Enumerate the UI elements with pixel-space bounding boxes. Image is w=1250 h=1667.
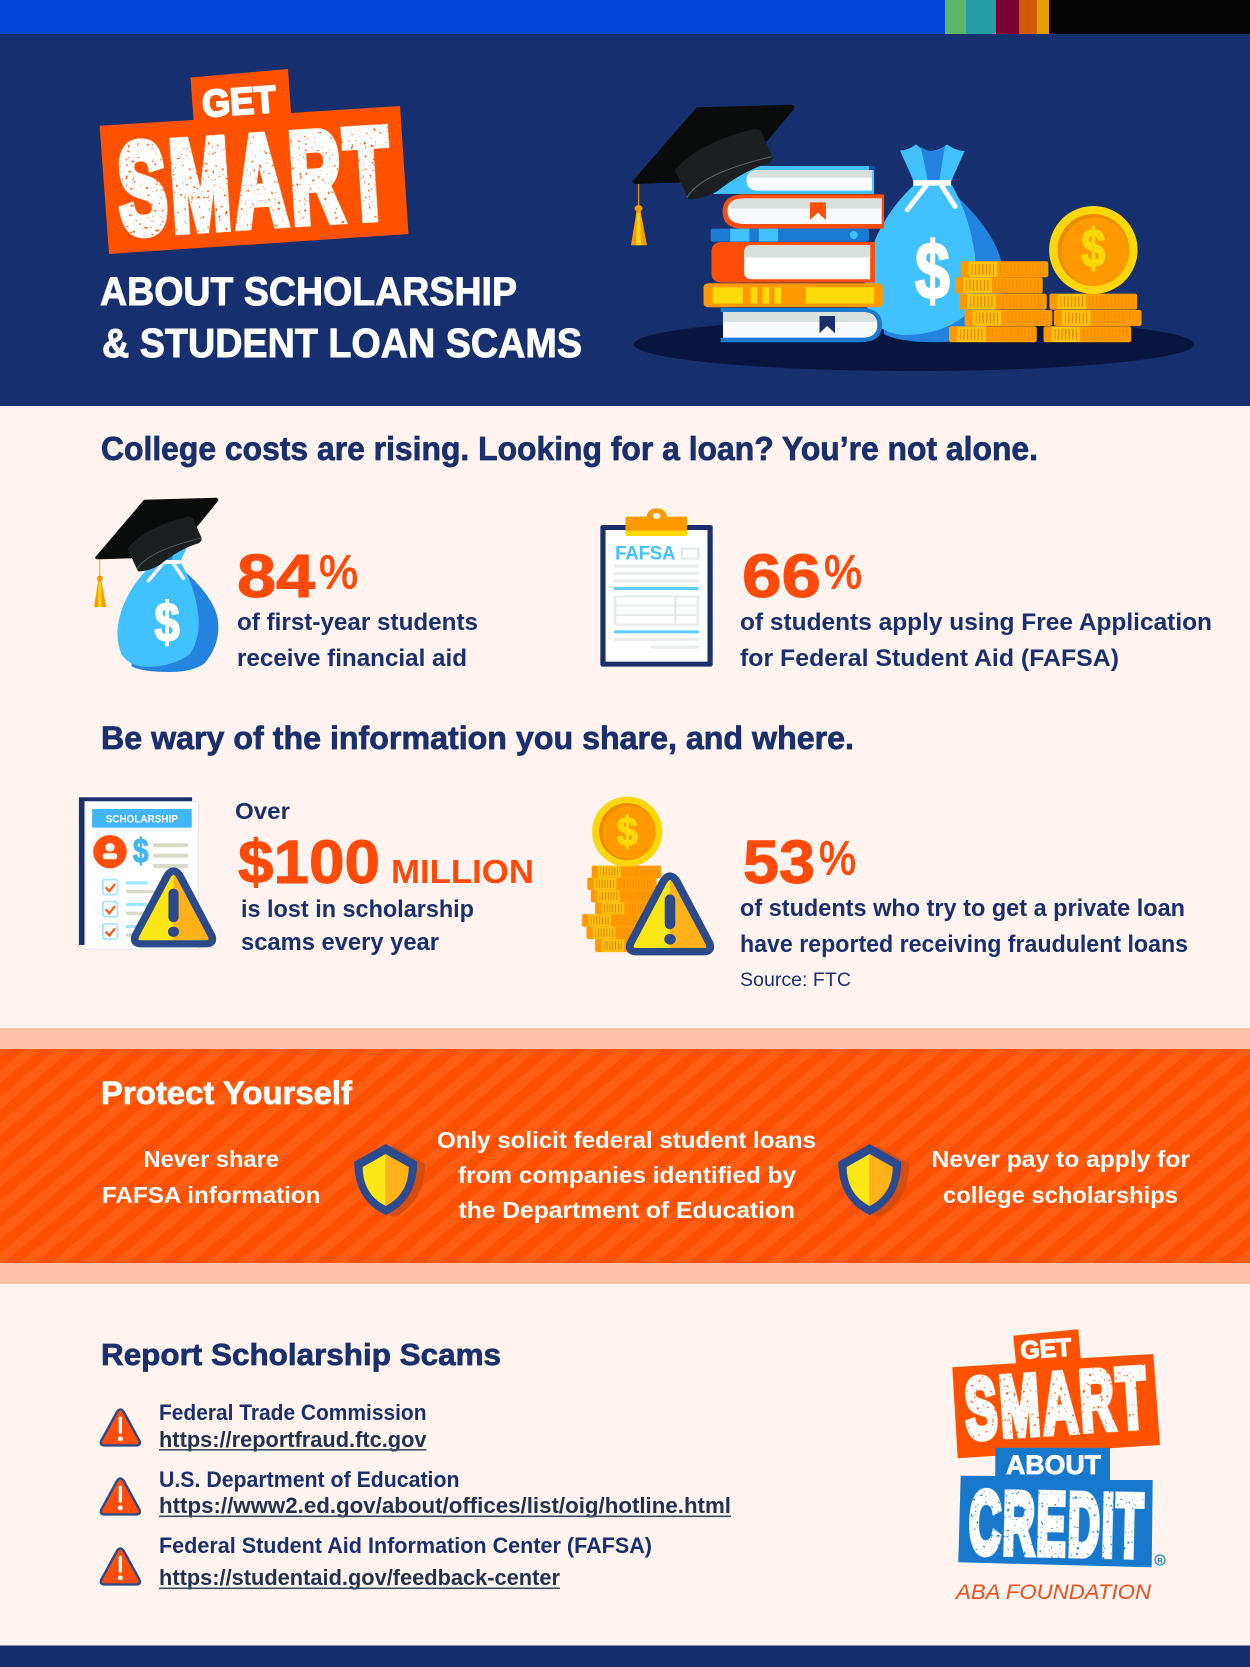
logo: get smart about credit: GET	[1019, 1333, 1072, 1365]
footer band	[0, 1646, 1250, 1667]
source note: Source: FTC	[740, 969, 851, 991]
stat: 66 percent	[740, 542, 1212, 672]
tip: federal student loans: the Department of Education	[458, 1197, 795, 1223]
report item: federal trade commission: https://reportfraud.ftc.gov	[159, 1427, 427, 1452]
tip: never pay: college scholarships	[943, 1182, 1178, 1208]
icon: coin stacks: $	[1081, 219, 1105, 278]
logo: get smart: SMART	[114, 102, 398, 261]
logo: get smart about credit: SMART	[962, 1350, 1152, 1457]
tip: FAFSA information: Never share	[144, 1146, 279, 1172]
report item: federal student aid: https://studentaid.gov/feedback-center	[159, 1565, 560, 1590]
header title: ABOUT SCHOLARSHIP	[100, 270, 517, 314]
aba foundation: ABA FOUNDATION	[954, 1581, 1152, 1604]
icon: scholarship document with warning	[79, 797, 212, 949]
icon: FAFSA clipboard	[600, 508, 713, 667]
report item: federal trade commission	[101, 1400, 427, 1452]
report item: federal trade commission: Federal Trade Commission	[159, 1400, 426, 1425]
report item: federal student aid: Federal Student Aid Information Center (FAFSA)	[159, 1533, 652, 1558]
stat: 53 percent: %	[819, 831, 856, 884]
icon: coins with warning: $	[617, 808, 638, 854]
icon: FAFSA clipboard: FAFSA	[615, 542, 675, 564]
icon: warning	[101, 1478, 140, 1514]
stat: 66 percent: for Federal Student Aid (FAFSA)	[740, 645, 1119, 672]
heading: report scholarship scams: Report Scholarship Scams	[101, 1337, 501, 1372]
stat: 53 percent: 53	[743, 828, 815, 896]
icon: shield	[354, 1144, 425, 1217]
stat: 100 million: $100	[238, 828, 380, 896]
icon: stack of books	[703, 166, 884, 342]
stat: 53 percent	[740, 828, 1188, 991]
stat: 100 million: is lost in scholarship	[241, 896, 474, 923]
tip: FAFSA information: FAFSA information	[102, 1182, 320, 1208]
header title: & STUDENT LOAN SCAMS	[102, 320, 582, 366]
registered mark	[1155, 1555, 1165, 1565]
stat: 100 million	[235, 798, 534, 956]
report item: federal student aid	[101, 1533, 652, 1590]
tip: never pay	[932, 1146, 1190, 1208]
stat: 53 percent: have reported receiving fraudulent loans	[740, 931, 1188, 958]
icon: scholarship document with warning: SCHOLARSHIP	[106, 814, 178, 825]
top colour bar	[0, 0, 1250, 34]
tip: federal student loans	[437, 1127, 816, 1223]
heading: be wary: Be wary of the information you share, and where.	[101, 720, 854, 756]
stat: 84 percent	[237, 542, 478, 672]
stat: 100 million: MILLION	[391, 853, 534, 890]
icon: scholarship document with warning: $	[133, 833, 149, 870]
stat: 100 million: Over	[235, 798, 290, 824]
logo: get smart about credit	[952, 1329, 1165, 1604]
report item: department of education: U.S. Department of Education	[159, 1467, 460, 1492]
logo: get smart about credit: CREDIT	[968, 1473, 1146, 1575]
icon: coins with warning	[582, 797, 710, 952]
icon: money bag with graduation cap	[94, 498, 218, 672]
registered mark: R	[1157, 1556, 1163, 1565]
icon: money bag	[865, 144, 1003, 342]
stat: 66 percent: 66	[742, 542, 821, 610]
protect heading: Protect Yourself	[101, 1075, 352, 1111]
logo: get smart about credit: ABOUT	[1006, 1450, 1101, 1480]
icon: graduation cap	[631, 105, 794, 245]
tip: federal student loans: Only solicit federal student loans	[437, 1127, 816, 1153]
stat: 53 percent: of students who try to get a private loan	[740, 895, 1185, 922]
stat: 84 percent: receive financial aid	[237, 645, 467, 672]
report item: department of education: https://www2.ed.gov/about/offices/list/oig/hotline.html	[159, 1493, 731, 1518]
heading: college costs: College costs are rising. Looking for a loan? You’re not alone.	[101, 430, 1038, 467]
header title	[100, 270, 582, 366]
tip: federal student loans: from companies identified by	[458, 1162, 796, 1188]
panel: header	[0, 34, 1250, 406]
tip: never pay: Never pay to apply for	[932, 1146, 1190, 1172]
logo: get smart: GET	[201, 79, 277, 126]
stat: 66 percent: %	[824, 545, 862, 598]
stat: 84 percent: 84	[237, 542, 315, 610]
tip: FAFSA information	[102, 1146, 320, 1208]
stat: 84 percent: of first-year students	[237, 609, 478, 636]
stat: 84 percent: %	[319, 545, 358, 598]
icon: shield	[838, 1144, 909, 1217]
icon: warning	[101, 1548, 140, 1584]
stat: 100 million: scams every year	[241, 929, 439, 956]
icon: warning	[101, 1409, 140, 1445]
stat: 66 percent: of students apply using Free Application	[740, 609, 1212, 636]
icon: coin stacks	[949, 206, 1142, 342]
panel: protect yourself	[0, 1028, 1250, 1284]
report item: department of education	[101, 1467, 731, 1518]
shadow	[634, 318, 1194, 371]
illustration: books, money bag and coins	[631, 105, 1194, 371]
